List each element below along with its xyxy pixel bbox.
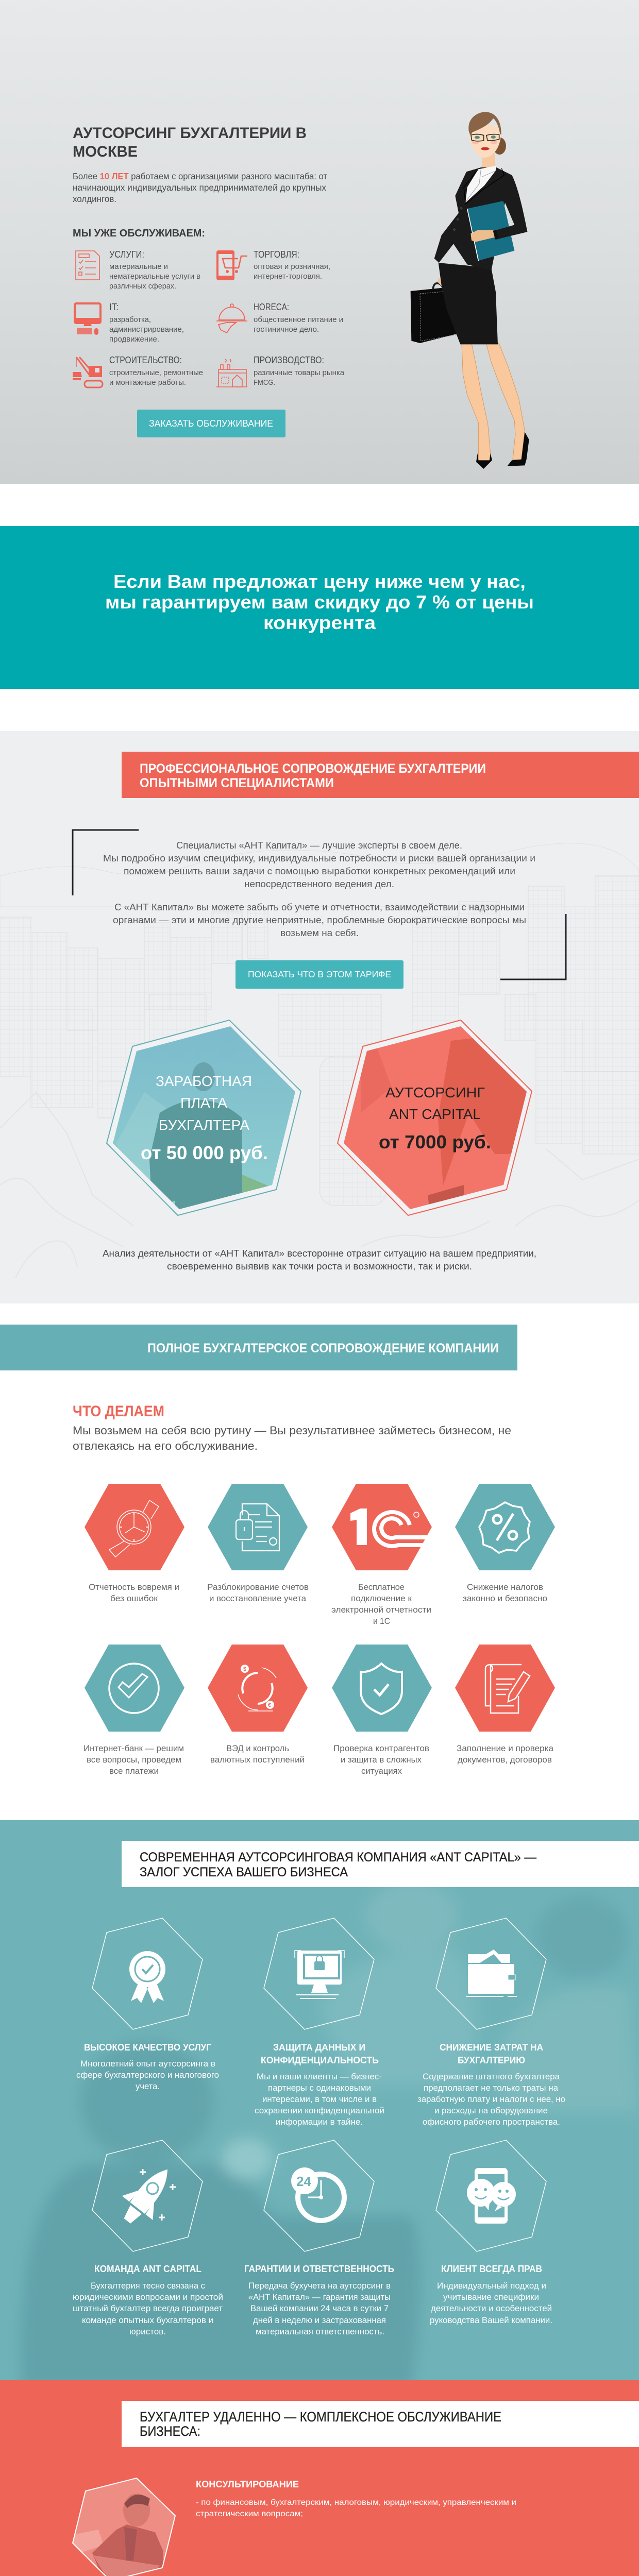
order service button: ЗАКАЗАТЬ ОБСЛУЖИВАНИЕ: [149, 418, 273, 429]
hexagon: outsourcing price: ANT CAPITAL: [389, 1106, 481, 1122]
service: internet bank: все вопросы, проведем: [87, 1755, 181, 1765]
advantage: lower costs: офисного рабочего пространства.: [423, 2117, 560, 2127]
analysis note: Анализ деятельности от «АНТ Капитал» всесторонне отразит ситуацию на вашем предприятии,: [103, 1248, 536, 1259]
service: document checks: документов, договоров: [458, 1755, 552, 1765]
service block: consulting: КОНСУЛЬТИРОВАНИЕ: [196, 2479, 299, 2489]
service: counterparty check: и защита в сложных: [341, 1755, 422, 1765]
service: counterparty check: ситуациях: [361, 1766, 402, 1776]
hero section: [0, 0, 639, 484]
company advantages section: [0, 1820, 639, 2391]
advantage: guarantees: 24: [296, 2174, 311, 2189]
service: unblocking accounts: и восстановление учета: [209, 1594, 307, 1603]
service: free 1C connection: подключение к: [351, 1594, 412, 1603]
service: tax reduction: Снижение налогов: [467, 1582, 543, 1592]
what we do text: отвлекаясь на его обслуживание.: [73, 1439, 258, 1452]
client type: manufacturing: [216, 355, 345, 387]
client type: manufacturing: различные товары рынка: [254, 368, 345, 377]
hero description: начинающих индивидуальных предпринимателей до крупных: [73, 182, 326, 193]
hexagon: accountant salary: от 50 000 руб.: [141, 1142, 268, 1163]
client type: services: нематериальные услуги в: [109, 272, 200, 281]
intro paragraphs: поможем решить ваши задачи с помощью выработки конкретных рекомендаций или: [124, 866, 515, 876]
advantage: lower costs: заработную плату и налоги с нее, но: [417, 2094, 565, 2104]
hexagon: outsourcing price: от 7000 руб.: [379, 1131, 491, 1153]
blurred team photo background: [20, 1880, 639, 2391]
service: foreign trade control: [208, 1645, 308, 1765]
what we do text: [73, 1424, 511, 1452]
service: counterparty check: Проверка контрагентов: [333, 1743, 429, 1753]
service block: consulting: - по финансовым, бухгалтерским, налоговым, юридическим, управленческим и: [196, 2498, 516, 2507]
client type: construction: строительные, ремонтные: [109, 368, 203, 377]
advantage: client is right: руководства Вашей компании.: [430, 2315, 552, 2325]
client type: HoReCa: общественное питание и: [254, 315, 343, 324]
client type: services: различных сферах.: [109, 282, 176, 291]
service block: consulting: стратегическим вопросам;: [196, 2510, 303, 2518]
show tariff button: [236, 960, 403, 989]
client type: services: УСЛУГИ:: [109, 249, 144, 260]
service: foreign trade control: ВЭД и контроль: [226, 1743, 289, 1753]
advantage: lower costs: БУХГАЛТЕРИЮ: [458, 2055, 525, 2065]
guarantee text: [105, 571, 534, 633]
service: reporting on time: [85, 1484, 184, 1603]
advantage: data protection: Мы и наши клиенты — бизнес-: [257, 2072, 382, 2081]
service: document checks: Заполнение и проверка: [457, 1743, 554, 1753]
client type: trade: оптовая и розничная,: [254, 262, 330, 271]
intro paragraphs: С «АНТ Капитал» вы можете забыть об учете и отчетности, взаимодействии с надзорными: [114, 902, 525, 912]
advantage: guarantees: [244, 2140, 394, 2336]
section heading banner: БИЗНЕСА:: [140, 2424, 200, 2439]
service: tax reduction: [455, 1484, 555, 1603]
section heading banner: ПОЛНОЕ БУХГАЛТЕРСКОЕ СОПРОВОЖДЕНИЕ КОМПАНИИ: [147, 1341, 499, 1355]
advantage: high quality: ВЫСОКОЕ КАЧЕСТВО УСЛУГ: [84, 2042, 211, 2053]
advantage: data protection: [255, 1918, 384, 2127]
advantage: high quality: Многолетний опыт аутсорсинга в: [80, 2059, 215, 2069]
professional support section: [0, 731, 639, 1303]
intro paragraphs: непосредственного ведения дел.: [244, 878, 394, 889]
client type: IT: [75, 302, 184, 344]
service: foreign trade control: валютных поступлений: [210, 1755, 305, 1765]
advantage: data protection: интересами, в том числе и в: [262, 2094, 377, 2104]
hexagon: accountant salary: БУХГАЛТЕРА: [159, 1117, 249, 1133]
advantage: data protection: сохранении конфиденциальной: [255, 2106, 384, 2115]
discount guarantee banner: [0, 526, 639, 689]
intro paragraphs: органами — эти и многие другие неприятные, проблемные бюрократические вопросы мы: [113, 914, 526, 925]
client types grid: [73, 249, 345, 387]
advantage: data protection: информации в тайне.: [276, 2117, 363, 2127]
advantage: high quality: учета.: [136, 2081, 160, 2091]
guarantee text: Если Вам предложат цену ниже чем у нас,: [113, 571, 526, 592]
advantage: guarantees: дней в неделю и застрахованная: [253, 2315, 386, 2325]
client type: construction: [73, 355, 203, 387]
section heading banner: ЗАЛОГ УСПЕХА ВАШЕГО БИЗНЕСА: [140, 1865, 348, 1879]
section heading banner: СОВРЕМЕННАЯ АУТСОРСИНГОВАЯ КОМПАНИЯ «ANT CAPITAL» —: [140, 1850, 536, 1865]
service: foreign trade control: $: [243, 1666, 246, 1672]
advantage: team: юристов.: [129, 2327, 166, 2336]
advantage: team: штатный бухгалтер всегда проиграет: [73, 2303, 223, 2313]
section heading banner: [0, 1325, 517, 1370]
illustration: businesswoman with folder and briefcase: [411, 112, 529, 469]
client type: HoReCa: гостиничное дело.: [254, 325, 319, 334]
advantage: guarantees: Вашей компании 24 часа в сутки 7: [250, 2303, 389, 2313]
intro paragraphs: возьмем на себя.: [280, 927, 359, 938]
service: internet bank: все платежи: [109, 1766, 159, 1776]
client type: manufacturing: ПРОИЗВОДСТВО:: [254, 355, 324, 365]
advantage: lower costs: и расходы на оборудование: [434, 2106, 548, 2115]
client type: IT: IT:: [109, 302, 119, 312]
service: reporting on time: Отчетность вовремя и: [89, 1582, 179, 1592]
service: document checks: [455, 1645, 555, 1765]
advantage: team: команде опытных бухгалтеров и: [82, 2315, 213, 2325]
advantage: data protection: ЗАЩИТА ДАННЫХ И: [273, 2042, 365, 2053]
advantage: team: Бухгалтерия тесно связана с: [91, 2281, 205, 2291]
what we do text: Мы возьмем на себя всю рутину — Вы результативнее займетесь бизнесом, не: [73, 1424, 511, 1437]
client type: IT: разработка,: [109, 315, 151, 324]
city sketch background: [0, 876, 639, 1206]
client type: HoReCa: [216, 302, 343, 334]
advantage: high quality: сфере бухгалтерского и налогового: [76, 2070, 219, 2080]
advantage: lower costs: [417, 1918, 565, 2127]
hero title: МОСКВЕ: [73, 143, 138, 160]
hero title: [73, 125, 307, 160]
advantage: high quality: [76, 1918, 219, 2091]
remote accountant section: [0, 2380, 639, 2576]
service: unblocking accounts: Разблокирование счетов: [207, 1582, 309, 1592]
hexagon: outsourcing price: АУТСОРСИНГ: [385, 1084, 485, 1100]
service: tax reduction: законно и безопасно: [463, 1594, 547, 1603]
hero title: АУТСОРСИНГ БУХГАЛТЕРИИ В: [73, 125, 307, 142]
service: internet bank: Интернет-банк — решим: [83, 1743, 184, 1753]
hero description: Более 10 ЛЕТ работаем с организациями разного масштаба: от: [73, 171, 327, 181]
intro paragraphs: [103, 840, 535, 938]
service: unblocking accounts: [207, 1484, 309, 1603]
advantage: data protection: партнеры с одинаковыми: [268, 2083, 371, 2093]
service: free 1C connection: электронной отчетности: [331, 1605, 431, 1615]
hero description: [73, 171, 327, 204]
show tariff button: ПОКАЗАТЬ ЧТО В ЭТОМ ТАРИФЕ: [248, 969, 391, 979]
service: free 1C connection: и 1С: [373, 1616, 390, 1626]
client type: manufacturing: FMCG.: [254, 378, 275, 387]
advantage: client is right: КЛИЕНТ ВСЕГДА ПРАВ: [441, 2264, 542, 2274]
client type: services: [76, 249, 200, 291]
advantage: team: юридическими вопросами и простой: [73, 2292, 223, 2302]
analysis note: своевременно выявив как точки роста и возможности, так и риски.: [167, 1261, 472, 1272]
service: free 1C connection: [331, 1484, 432, 1626]
section heading banner: [122, 2401, 639, 2447]
client type: IT: продвижение.: [109, 335, 159, 344]
service: internet bank: [83, 1645, 184, 1776]
client type: construction: и монтажные работы.: [109, 378, 186, 387]
advantage: guarantees: «АНТ Капитал» — гарантия защиты: [248, 2292, 391, 2302]
advantage: lower costs: Содержание штатного бухгалтера: [423, 2072, 560, 2081]
client type: IT: администрирование,: [109, 325, 184, 334]
advantage: guarantees: ГАРАНТИИ И ОТВЕТСТВЕННОСТЬ: [244, 2264, 394, 2274]
client type: trade: [216, 249, 330, 281]
advantage: client is right: [430, 2140, 552, 2325]
analysis note: [103, 1248, 536, 1272]
service: foreign trade control: €: [268, 1702, 271, 1708]
advantage: lower costs: СНИЖЕНИЕ ЗАТРАТ НА: [440, 2042, 543, 2053]
clients subheading: МЫ УЖЕ ОБСЛУЖИВАЕМ:: [73, 228, 205, 239]
client type: trade: интернет-торговля.: [254, 272, 322, 281]
hexagon: accountant salary: ПЛАТА: [180, 1095, 227, 1111]
hexagon: outsourcing price: [338, 1020, 532, 1216]
advantage: client is right: Индивидуальный подход и: [437, 2281, 546, 2291]
guarantee text: мы гарантируем вам скидку до 7 % от цены: [105, 591, 534, 613]
hero description: холдингов.: [73, 194, 116, 204]
advantage: team: [73, 2140, 223, 2336]
advantage: client is right: учитывание специфики: [443, 2292, 539, 2302]
section heading banner: [122, 752, 639, 798]
service: counterparty check: [332, 1645, 432, 1776]
hexagon: accountant salary: [107, 1020, 301, 1215]
advantage: client is right: деятельности и особенностей: [431, 2303, 552, 2313]
full accounting support section: [0, 1325, 555, 1776]
intro paragraphs: Специалисты «АНТ Капитал» — лучшие эксперты в своем деле.: [176, 840, 462, 851]
hexagon: accountant salary: ЗАРАБОТНАЯ: [156, 1073, 252, 1089]
advantage: guarantees: Передача бухучета на аутсорсинг в: [248, 2281, 391, 2291]
advantage: team: КОМАНДА ANT CAPITAL: [94, 2264, 201, 2274]
order service button: [137, 410, 285, 437]
advantage: data protection: КОНФИДЕНЦИАЛЬНОСТЬ: [261, 2055, 379, 2065]
client type: HoReCa: HORECA:: [254, 302, 289, 312]
advantage: guarantees: материальная ответственность.: [256, 2327, 384, 2336]
guarantee text: конкурента: [263, 612, 376, 633]
client type: services: материальные и: [109, 262, 168, 271]
section heading banner: ОПЫТНЫМИ СПЕЦИАЛИСТАМИ: [140, 776, 334, 790]
client type: trade: ТОРГОВЛЯ:: [254, 249, 299, 260]
section heading banner: [122, 1841, 639, 1887]
section heading banner: БУХГАЛТЕР УДАЛЕННО — КОМПЛЕКСНОЕ ОБСЛУЖИВАНИЕ: [140, 2409, 501, 2425]
client type: construction: СТРОИТЕЛЬСТВО:: [109, 355, 182, 365]
section heading banner: ПРОФЕССИОНАЛЬНОЕ СОПРОВОЖДЕНИЕ БУХГАЛТЕРИИ: [140, 761, 486, 776]
service block: consulting: [73, 2478, 516, 2576]
intro paragraphs: Мы подробно изучим специфику, индивидуальные потребности и риски вашей организации и: [103, 853, 535, 863]
service: free 1C connection: Бесплатное: [358, 1582, 405, 1592]
service: reporting on time: без ошибок: [110, 1594, 158, 1603]
what we do heading: ЧТО ДЕЛАЕМ: [73, 1403, 164, 1420]
advantage: lower costs: предполагает не только траты на: [424, 2083, 559, 2093]
